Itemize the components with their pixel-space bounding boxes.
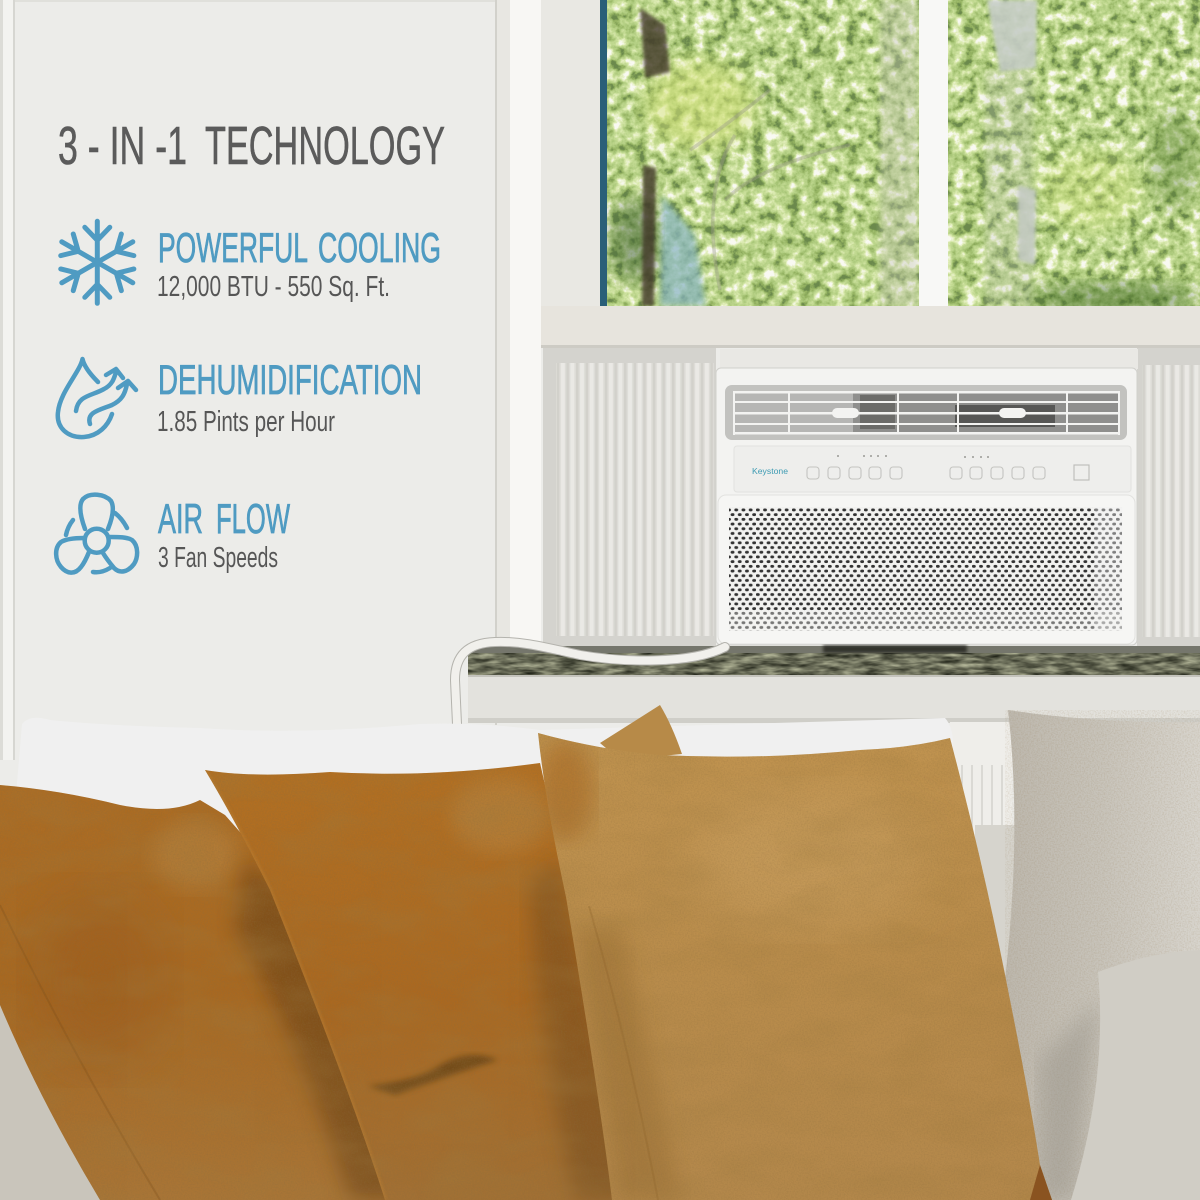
tree trunk dark — [640, 8, 670, 306]
grey cushion right — [1005, 710, 1200, 1200]
icon: fan — [56, 495, 137, 573]
pillow front — [530, 730, 1060, 1200]
grey cushion lower — [1071, 950, 1200, 1200]
control panel — [734, 446, 1131, 492]
shadow edge — [229, 860, 385, 1200]
dark foliage right — [1150, 110, 1200, 210]
crease — [368, 1055, 498, 1095]
window sill upper — [541, 306, 1200, 348]
power cord — [455, 642, 725, 724]
feature: air flow — [56, 495, 290, 574]
side accordion panels — [543, 348, 1200, 646]
white sofa back — [10, 718, 953, 835]
front grille — [718, 495, 1135, 644]
spec: pints per hour: 1.85 Pints per Hour — [157, 406, 335, 438]
heading: powerful cooling: COOLING — [318, 224, 441, 271]
heading: air flow: AIR — [158, 495, 203, 542]
left edge highlight — [205, 770, 385, 1200]
shadow near front pillow — [524, 861, 612, 1200]
pillow left — [0, 785, 385, 1200]
control buttons — [807, 465, 1089, 480]
window view with trees — [600, 0, 1200, 314]
spec: BTU and area: 12,000 BTU - 550 Sq. Ft. — [157, 271, 390, 303]
tree trunk pale — [987, 0, 1037, 265]
lit centre — [722, 822, 896, 904]
heading: air flow: FLOW — [216, 495, 290, 542]
pillow behind corner — [600, 705, 682, 760]
top cover — [720, 349, 1138, 369]
warm left corner — [537, 740, 593, 840]
window trim — [495, 0, 600, 725]
pillow front corner tuck — [1030, 1165, 1052, 1200]
spec: fan speeds: 3 Fan Speeds — [158, 542, 278, 574]
dark foliage bottom — [1024, 278, 1200, 306]
title: 3 - IN -1 — [58, 116, 187, 176]
radiator — [950, 722, 1012, 837]
seam — [0, 905, 160, 1200]
cushion shade — [1040, 1000, 1100, 1200]
unit body — [716, 368, 1137, 645]
pillow middle — [205, 763, 612, 1200]
feature: powerful cooling — [56, 221, 441, 303]
air conditioner unit — [716, 349, 1138, 645]
window mullion — [919, 0, 948, 306]
louver vent — [725, 385, 1127, 440]
heading: dehumidification: DEHUMIDIFICATION — [158, 356, 422, 403]
shadow under unit — [823, 645, 967, 653]
icon: snowflake — [56, 221, 139, 303]
pale trunk fade — [985, 70, 1033, 306]
title: TECHNOLOGY — [205, 116, 445, 176]
seam — [589, 906, 658, 1200]
sofa mid grey — [975, 825, 1035, 1015]
icon: water drop with arrows — [58, 359, 136, 437]
bright foliage — [645, 60, 755, 150]
sofa base left — [0, 1000, 105, 1200]
grey branches — [690, 90, 850, 290]
lit corner — [150, 820, 240, 890]
marble ledge — [468, 646, 1200, 723]
pale trunk left pane — [880, 0, 918, 306]
heading: powerful cooling: POWERFUL — [158, 224, 307, 271]
dark foliage near trunk — [610, 198, 660, 282]
feature: dehumidification — [58, 356, 422, 438]
bright foliage right — [1040, 150, 1140, 230]
indicator lights — [837, 455, 989, 458]
blue building patch — [660, 195, 706, 306]
frame edge blue — [600, 0, 607, 306]
wall moulding left — [0, 0, 495, 760]
brand label: Keystone — [752, 467, 789, 476]
shadow left edge — [575, 930, 680, 1200]
